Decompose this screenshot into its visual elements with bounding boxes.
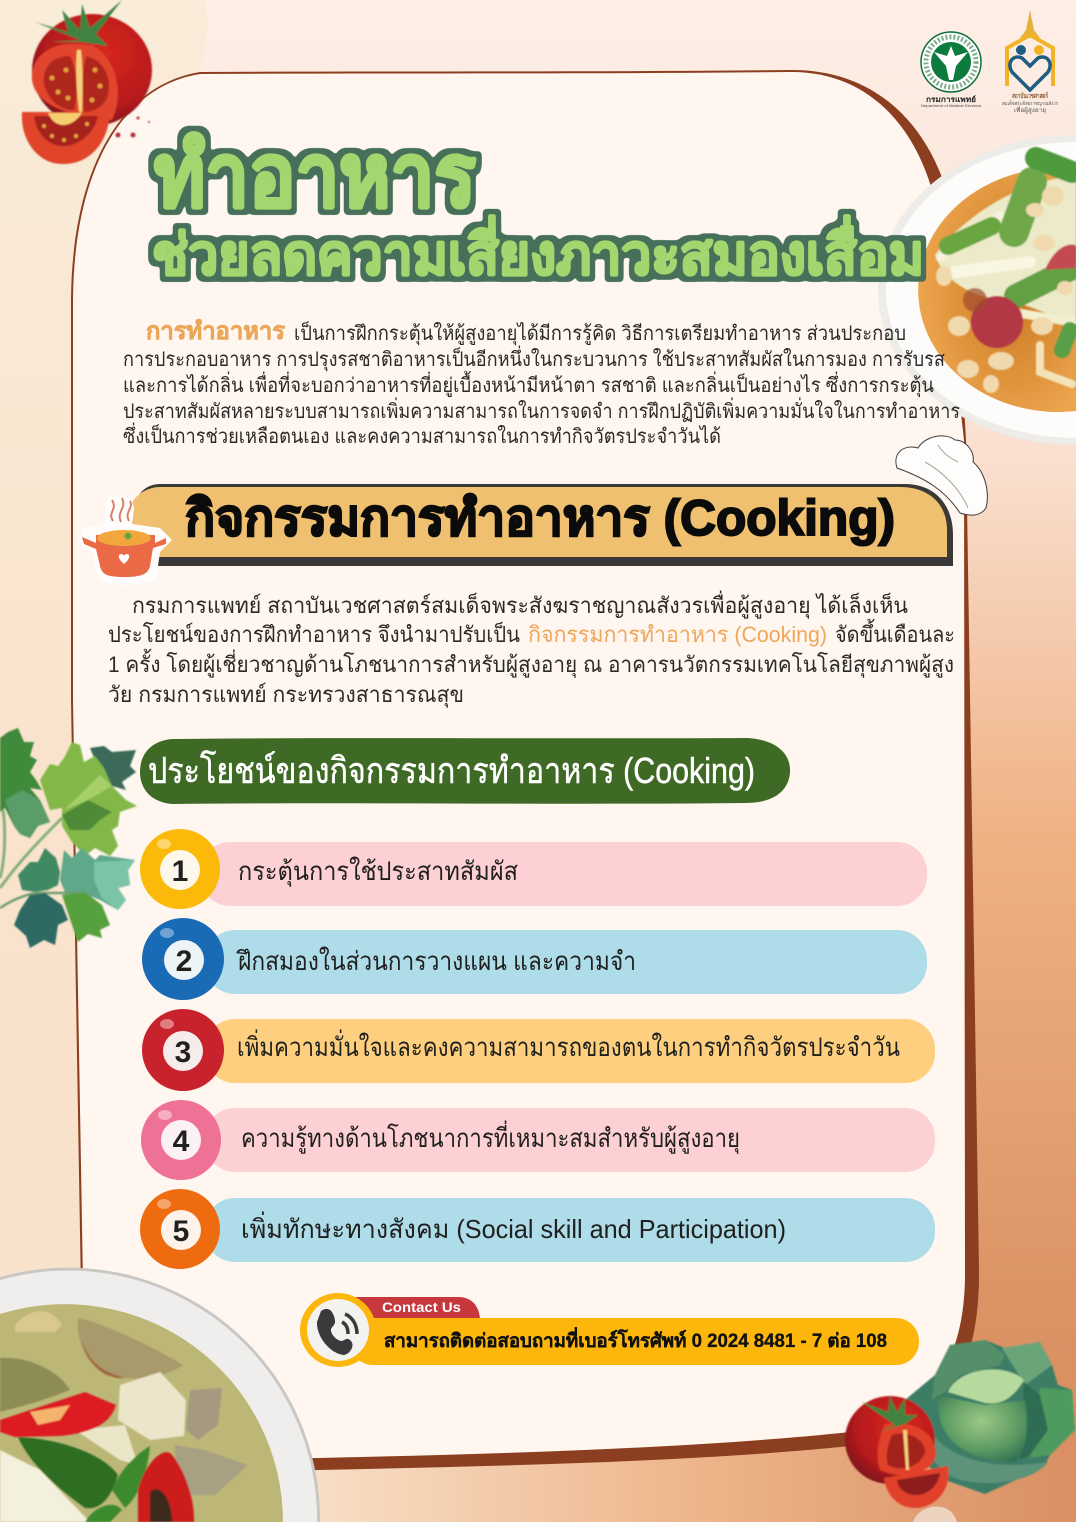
benefit 2: 2 xyxy=(176,945,192,978)
icon: phone xyxy=(300,1293,376,1367)
contact us tab: Contact Us xyxy=(382,1299,461,1315)
heading: benefits banner: ประโยชน์ของกิจกรรมการทำอาหาร (Cooking) xyxy=(148,750,755,791)
text block: intro paragraph: การประกอบอาหาร การปรุงรสชาติอาหารเป็นอีกหนึ่งในกระบวนการ ใช้ประสาทสัมผัสในการมอง การรับรส xyxy=(123,345,945,372)
benefit 4: 4 xyxy=(173,1125,190,1158)
text block: activity description: 1 ครั้ง โดยผู้เชี่ยวชาญด้านโภชนาการสำหรับผู้สูงอายุ ณ อาคารนวัตกรรมเทคโนโลยีสุขภาพผู้สูง xyxy=(108,649,954,678)
text block: intro paragraph: และการได้กลิ่น เพื่อที่จะบอกว่าอาหารที่อยู่เบื้องหน้ามีหน้าตา รสชาติ และกลิ่นเป็นอย่างไร ซึ่งการกระตุ้น xyxy=(123,371,934,398)
list: benefits xyxy=(140,829,935,1269)
benefit 4: ความรู้ทางด้านโภชนาการที่เหมาะสมสำหรับผู้สูงอายุ xyxy=(241,1120,740,1154)
title line 2: ช่วยลดความเสี่ยงภาวะสมองเสื่อม xyxy=(152,215,924,286)
title line 1: ทำอาหาร xyxy=(154,126,476,225)
icon: cabbage and tomato xyxy=(845,1340,1075,1508)
text block: activity description: กรมการแพทย์ สถาบันเวชศาสตร์สมเด็จพระสังฆราชญาณสังวรเพื่อผู้สูงอายุ ได้เล็งเห็น xyxy=(132,590,908,619)
icon: institute of geriatric medicine logo: สมเด็จพระสังฆราชญาณสังวร xyxy=(1002,99,1058,107)
benefit 5: 5 xyxy=(173,1215,189,1248)
highlighted activity name: กิจกรรมการทำอาหาร (Cooking) xyxy=(528,622,827,647)
text block: intro paragraph: เป็นการฝึกกระตุ้นให้ผู้สูงอายุได้มีการรู้คิด วิธีการเตรียมทำอาหาร ส่วนประกอบ xyxy=(294,320,906,346)
icon: cilantro xyxy=(0,728,137,948)
text block: intro paragraph xyxy=(123,318,960,448)
icon: department of medical services logo xyxy=(921,32,981,108)
dark top-left leaf xyxy=(0,728,50,838)
text block: intro paragraph: ประสาทสัมผัสหลายระบบสามารถเพิ่มความสามารถในการจดจำ การฝึกปฏิบัติเพิ่มความมั่นใจในการทำอาหาร xyxy=(123,397,960,423)
text block: intro paragraph: ซึ่งเป็นการช่วยเหลือตนเอง และคงความสามารถในการทำกิจวัตรประจำวันได้ xyxy=(123,422,721,448)
heading banner: cooking activity xyxy=(130,484,953,566)
benefit 2 xyxy=(142,918,927,1000)
benefit 3: เพิ่มความมั่นใจและคงความสามารถของตนในการทำกิจวัตรประจำวัน xyxy=(237,1029,900,1062)
icon: green curry bowl xyxy=(0,1268,320,1522)
benefit 1 xyxy=(140,829,927,909)
icon: institute of geriatric medicine logo: เพื่อผู้สูงอายุ xyxy=(1014,106,1046,114)
panel: paper card with brown border xyxy=(71,70,979,1470)
icon: cooking pot xyxy=(78,495,172,585)
icon: institute of geriatric medicine logo: สถาบันเวชศาสตร์ xyxy=(1012,91,1048,100)
intro lead word: การทำอาหาร xyxy=(146,318,285,345)
heading: benefits banner xyxy=(140,738,790,804)
benefit 5 xyxy=(140,1189,935,1269)
heading banner: cooking activity: กิจกรรมการทำอาหาร (Cooking) xyxy=(185,490,895,546)
text block: activity description: วัย กรมการแพทย์ กระทรวงสาธารณสุข xyxy=(108,682,464,708)
title xyxy=(152,126,924,286)
contact phone pill xyxy=(350,1318,919,1365)
text block: activity description xyxy=(108,590,955,708)
icon: papaya salad plate xyxy=(878,135,1076,445)
benefit 3: 3 xyxy=(175,1036,191,1069)
contact us tab xyxy=(355,1297,480,1319)
text block: activity description: ประโยชน์ของการฝึกทำอาหาร จึงนำมาปรับเป็น xyxy=(108,620,520,647)
icon: chef hat xyxy=(896,436,987,515)
icon: tomato top left xyxy=(22,0,152,164)
benefit 3 xyxy=(142,1009,935,1091)
icon: department of medical services logo: Department of Medical Services xyxy=(921,103,981,108)
benefit 1: กระตุ้นการใช้ประสาทสัมผัส xyxy=(238,856,518,887)
contact phone pill: สามารถติดต่อสอบถามที่เบอร์โทรศัพท์ 0 2024 8481 - 7 ต่อ 108 xyxy=(384,1327,887,1352)
benefit 2: ฝึกสมองในส่วนการวางแผน และความจำ xyxy=(236,946,636,976)
benefit 5: เพิ่มทักษะทางสังคม (Social skill and Participation) xyxy=(241,1211,786,1244)
benefit 1: 1 xyxy=(172,855,188,888)
benefit 4 xyxy=(141,1100,935,1180)
icon: institute of geriatric medicine logo xyxy=(1002,10,1058,114)
icon: department of medical services logo: กรมการแพทย์ xyxy=(926,95,976,104)
text block: activity description: จัดขึ้นเดือนละ xyxy=(835,619,955,647)
contact block xyxy=(300,1293,919,1367)
